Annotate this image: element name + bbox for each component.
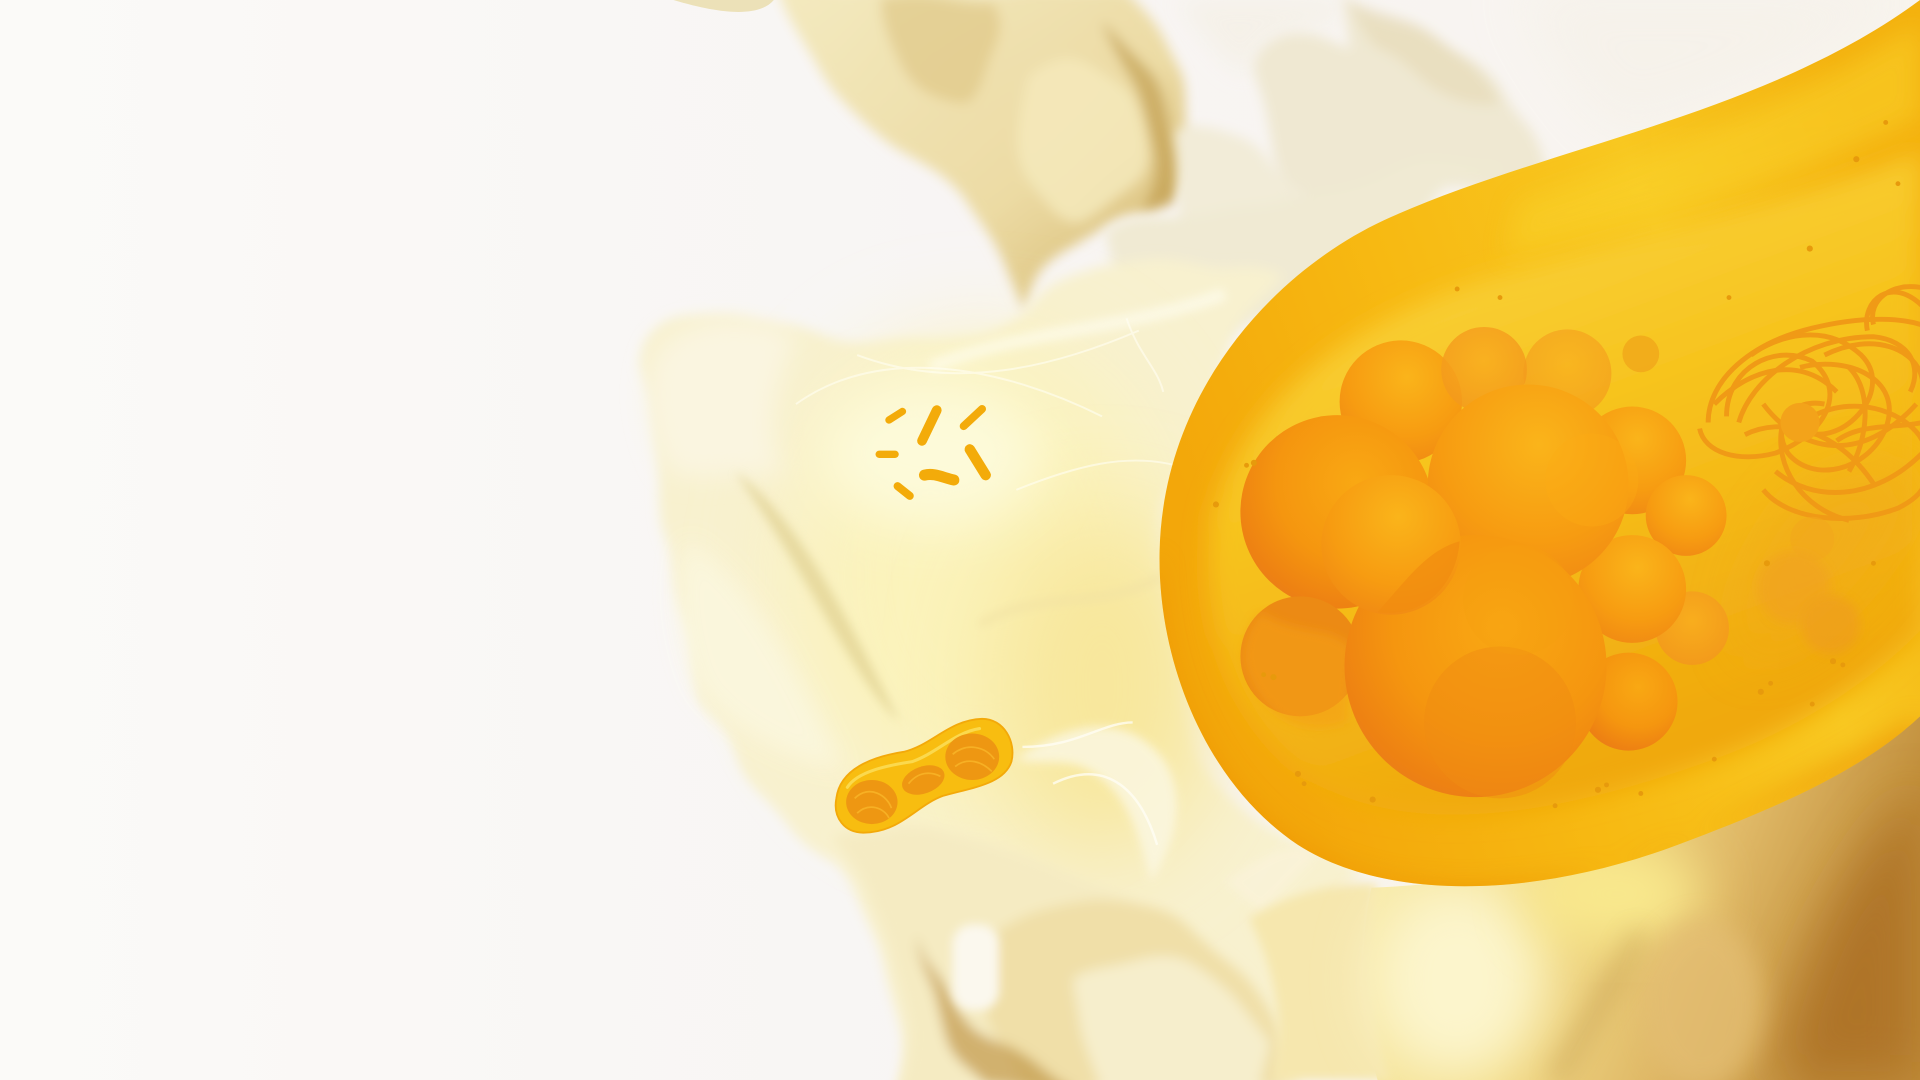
illustration: bacterium in golden smoke bbox=[635, 0, 1920, 1080]
bacterium inner cytoplasm bbox=[1139, 24, 1920, 918]
bacterium shell bbox=[1160, 0, 1920, 886]
smoke: upper right wisps bbox=[1108, 0, 1910, 367]
smoke: lower wisps bbox=[833, 722, 1316, 1080]
highlight bbox=[847, 729, 980, 787]
dividing bacterium body bbox=[836, 719, 1013, 833]
surface droplets bbox=[1213, 120, 1900, 808]
smoke: central billow bbox=[647, 260, 1365, 1080]
DNA tangle bbox=[1700, 287, 1920, 520]
nucleoids bbox=[846, 733, 999, 824]
smoke: top fold bbox=[673, 0, 1192, 306]
dividing bacterium bbox=[836, 719, 1013, 833]
main bacterium bbox=[1139, 0, 1920, 918]
small rod bacteria cluster bbox=[879, 409, 986, 496]
cluster of orange spheres bbox=[1240, 327, 1729, 798]
smoke: bottom right bbox=[1249, 716, 1920, 1080]
lower right glow spheres bbox=[1757, 517, 1860, 654]
